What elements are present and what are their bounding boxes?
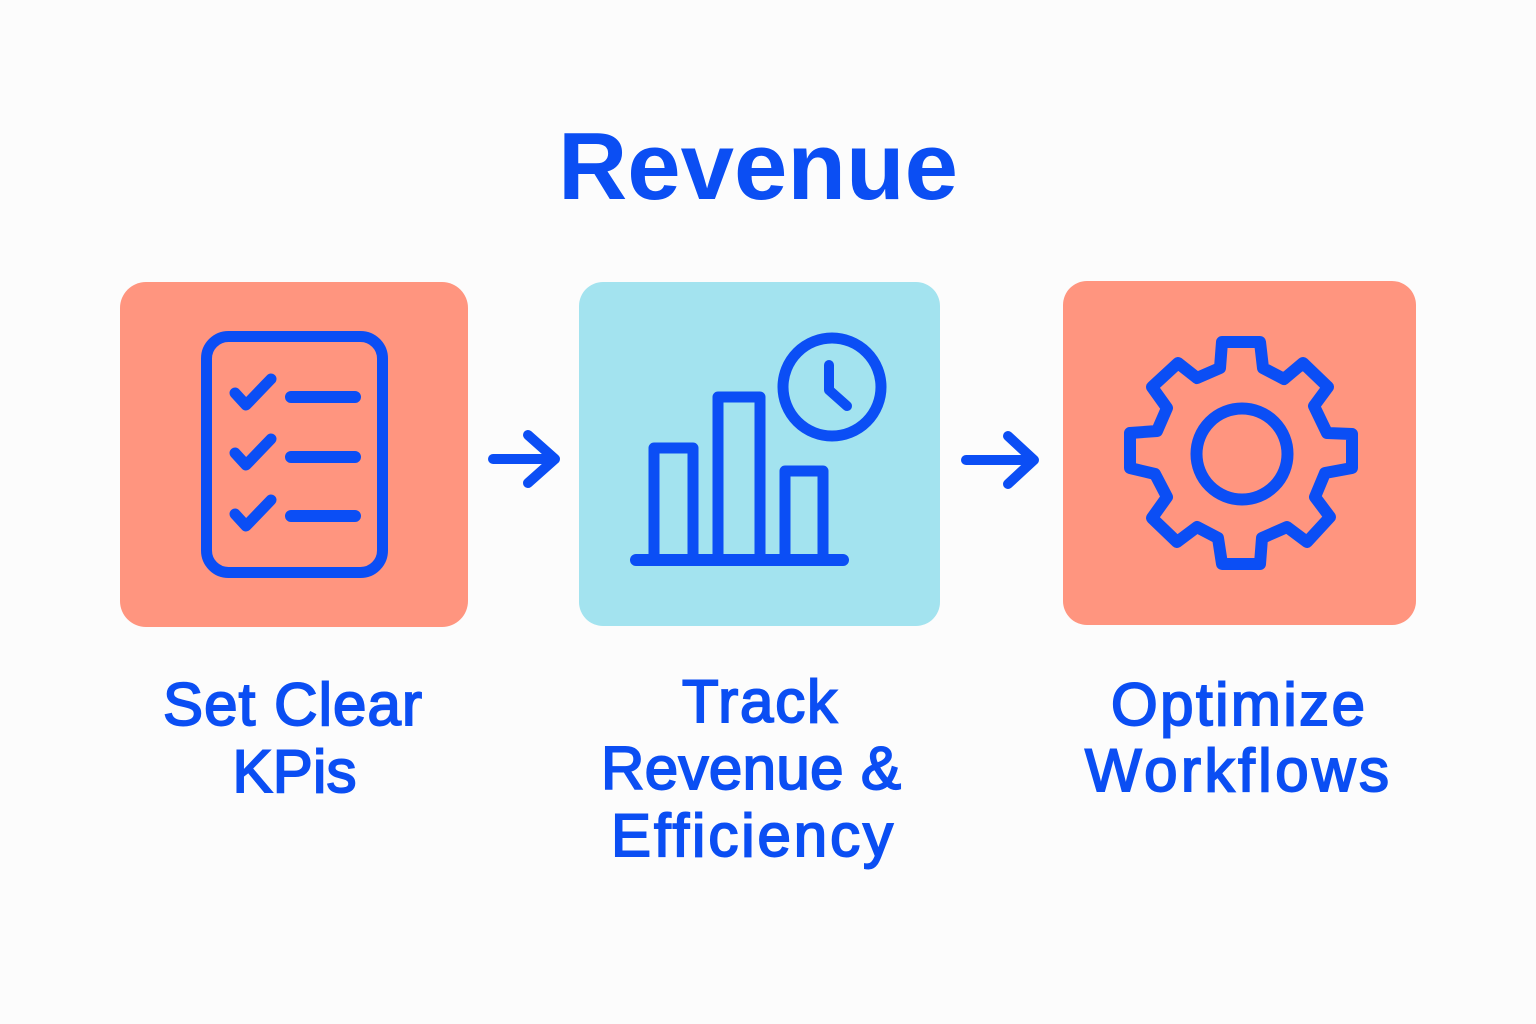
label: set clear KPIs: KPis — [232, 738, 356, 805]
icon: bar chart with clock — [636, 338, 881, 560]
panel: set clear KPIs — [120, 282, 468, 627]
label: optimize workflows: Optimize — [1111, 671, 1365, 738]
panel: track revenue and efficiency — [579, 282, 940, 626]
label: track revenue and efficiency: Track — [682, 668, 838, 735]
icon: checklist — [206, 336, 382, 572]
label: track revenue and efficiency: Efficiency — [611, 802, 893, 869]
label: track revenue and efficiency: Revenue & — [601, 735, 901, 802]
icon: gear — [1130, 342, 1352, 564]
label: optimize workflows: Workflows — [1085, 737, 1389, 804]
arrow: first to second — [493, 435, 555, 483]
title: Revenue — [558, 113, 958, 220]
label: set clear KPIs — [163, 671, 422, 805]
panel: optimize workflows — [1063, 281, 1416, 625]
label: track revenue and efficiency — [601, 668, 901, 869]
label: optimize workflows — [1085, 671, 1389, 804]
arrow: second to third — [966, 436, 1034, 484]
label: set clear KPIs: Set Clear — [163, 671, 422, 738]
